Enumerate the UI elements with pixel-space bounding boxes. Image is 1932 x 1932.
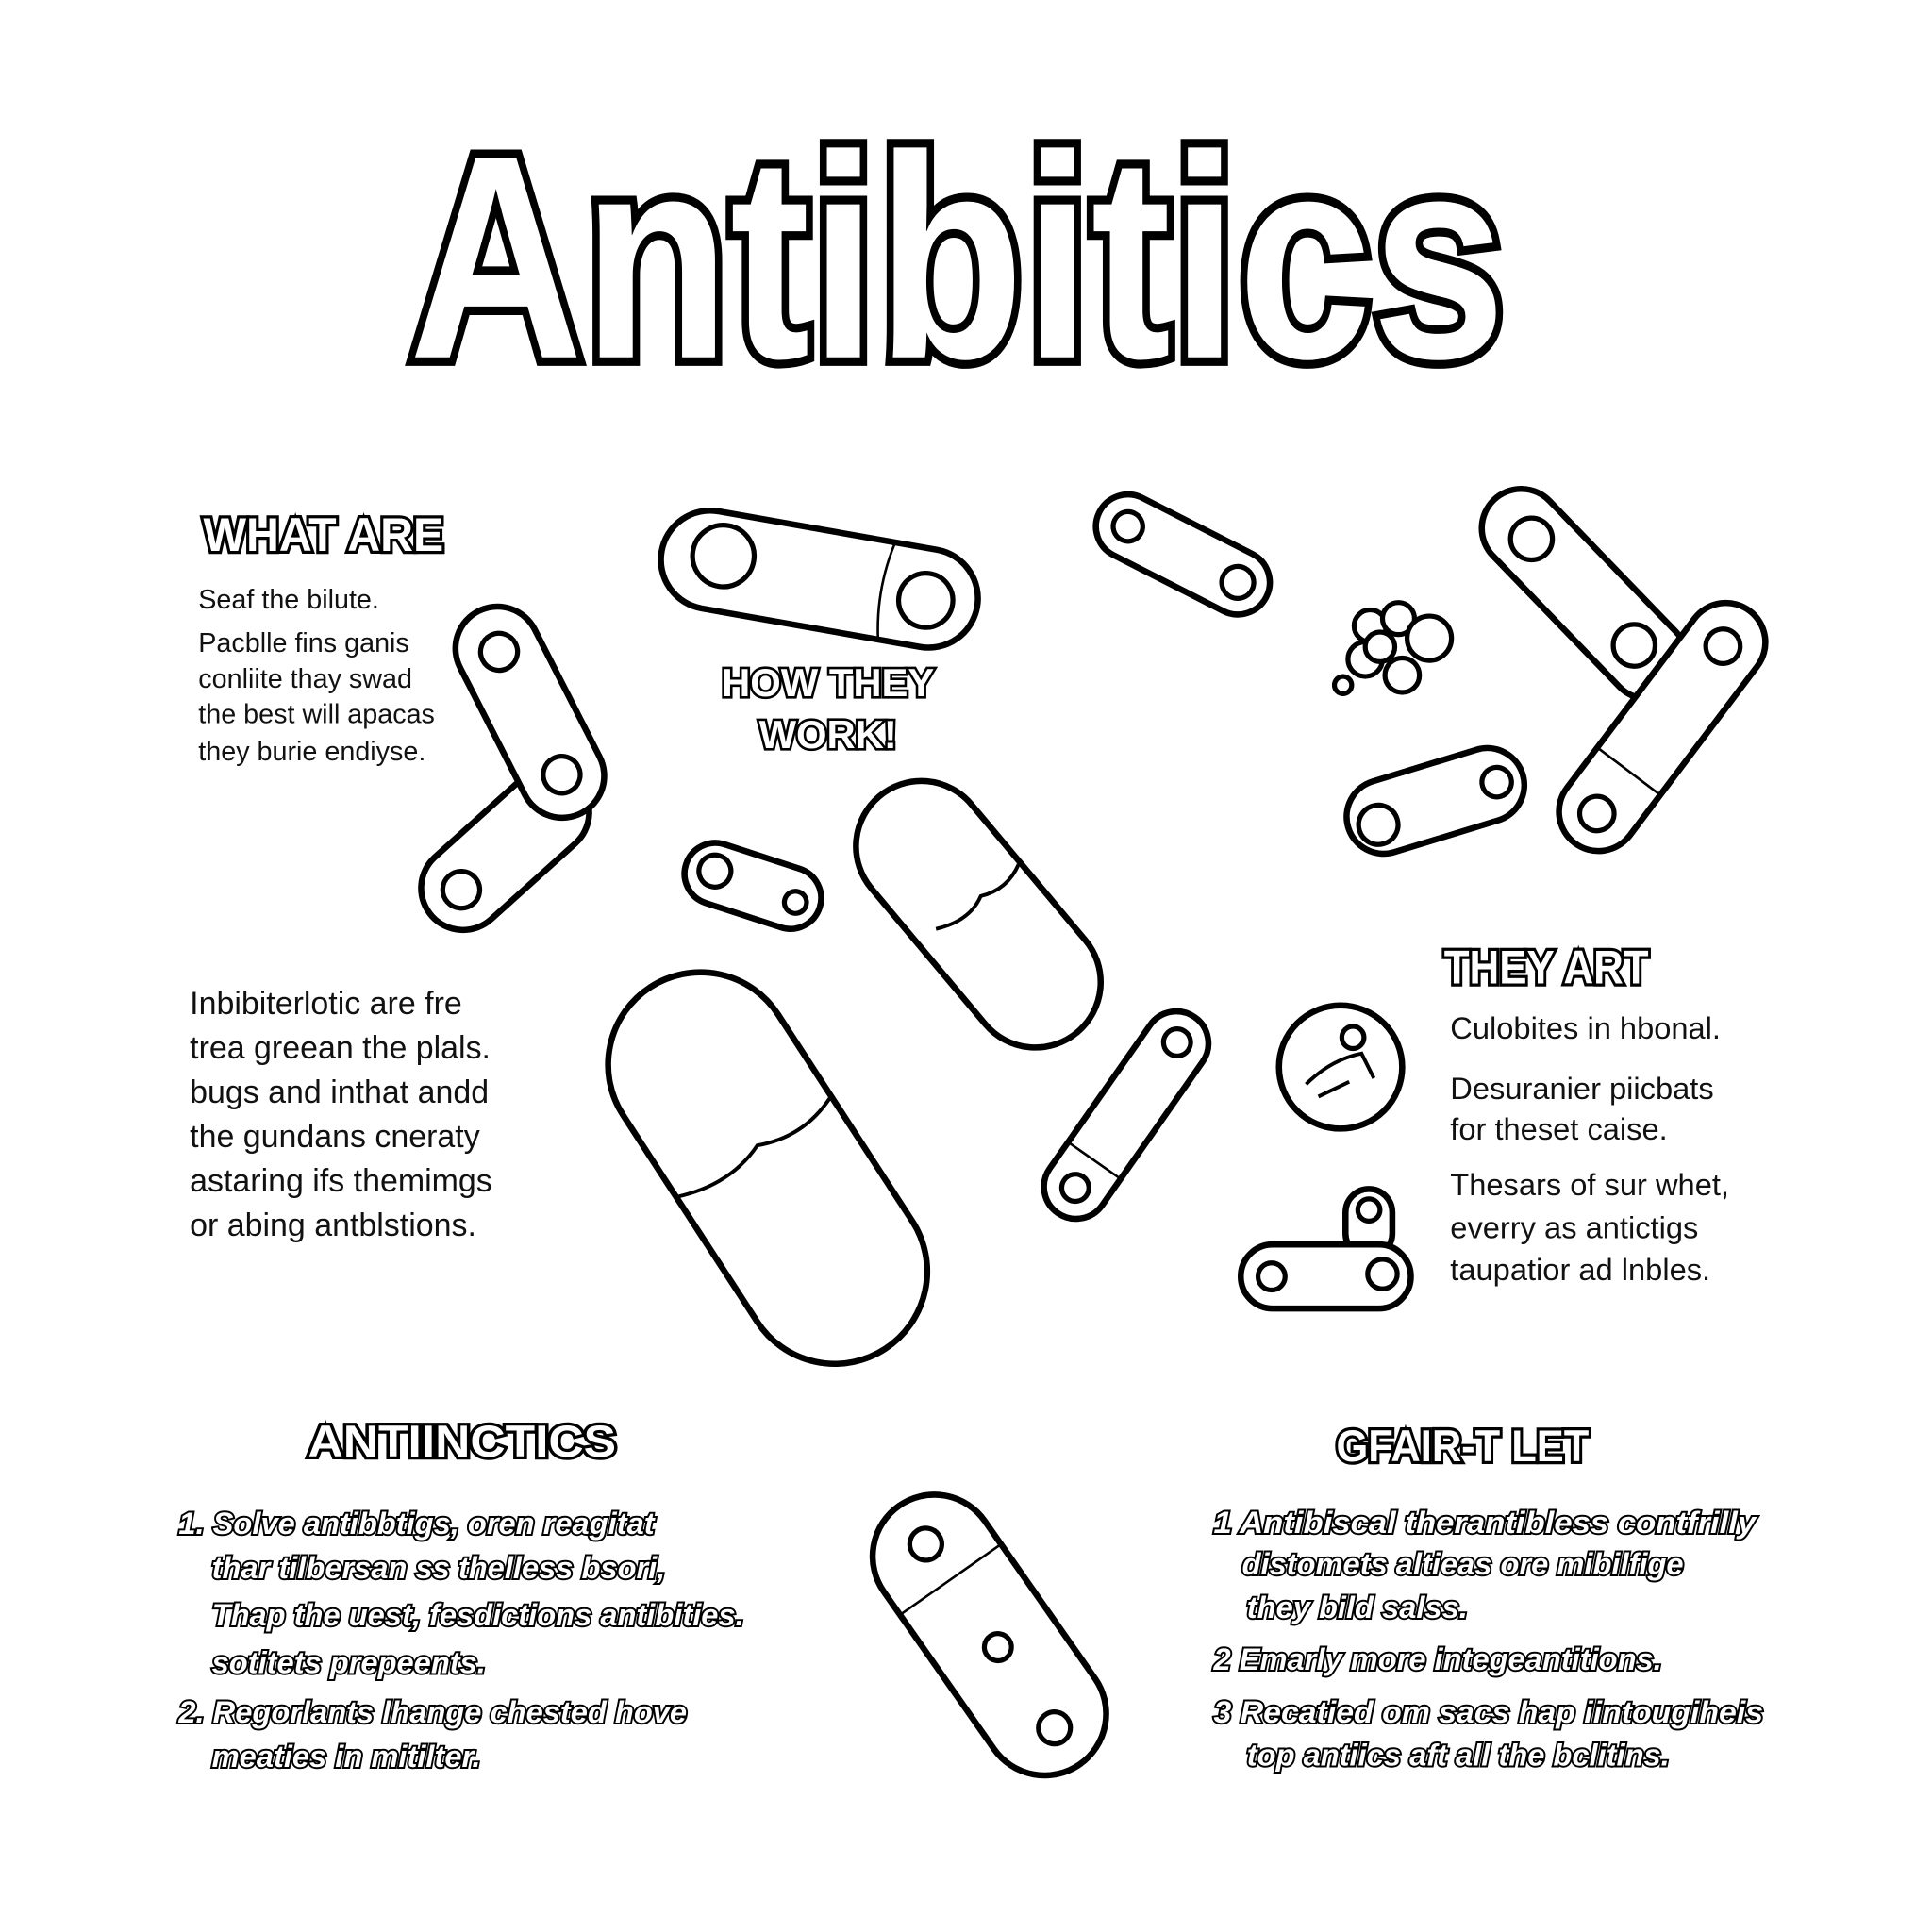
pill: small bottom right: [1241, 1189, 1411, 1308]
text block: left paragraph: Inbibiterlotic are fre: [190, 986, 462, 1022]
heading: how they work: WORK!: [759, 712, 897, 757]
title: Antibitics: [409, 96, 1506, 420]
text block: what are: Pacblle fins ganis: [198, 628, 409, 658]
list: gfair-t let: distomets altieas ore mibilfige: [1242, 1546, 1684, 1581]
text block: they art: Thesars of sur whet,: [1450, 1167, 1729, 1202]
list: antiinctics: [177, 1506, 744, 1774]
list: gfair-t let: [1213, 1505, 1763, 1773]
capsule: bottom: [848, 1471, 1130, 1800]
list: gfair-t let: 2 Emarly more integeantitions.: [1213, 1641, 1662, 1676]
list: gfair-t let: they bild salss.: [1247, 1590, 1468, 1624]
pill: right long: [1543, 587, 1781, 867]
capsule: big: [573, 937, 962, 1399]
pill: small diagonal: [1031, 999, 1221, 1231]
list: antiinctics: sotitets prepeents.: [212, 1645, 486, 1680]
text block: they art: for theset caise.: [1450, 1111, 1668, 1146]
text block: what are: conliite thay swad: [198, 664, 412, 694]
text block: left paragraph: bugs and inthat andd: [190, 1074, 489, 1110]
pill: small mid: [676, 835, 829, 937]
heading: they art: THEY ART: [1444, 941, 1649, 993]
list: antiinctics: thar tilbersan ss thelless bsori,: [212, 1550, 665, 1585]
pill: small top: [1085, 483, 1281, 625]
heading: how they work: [722, 660, 934, 757]
list: gfair-t let: 1 Antibiscal therantibless contfrilly: [1214, 1505, 1757, 1540]
text block: what are: [198, 585, 435, 767]
list: antiinctics: 1. Solve antibbtigs, oren reagitat: [178, 1506, 656, 1541]
list: gfair-t let: top antiics aft all the bclitins.: [1247, 1738, 1670, 1773]
text block: what are: they burie endiyse.: [198, 737, 425, 767]
list: antiinctics: 2. Regorlants lhange chested hove: [177, 1694, 687, 1729]
heading: what are: WHAT ARE: [204, 508, 443, 561]
text block: they art: everry as antictigs: [1450, 1210, 1698, 1245]
list: gfair-t let: 3 Recatied om sacs hap iintougiheis: [1214, 1694, 1763, 1729]
icon: bubble cluster: [1335, 603, 1452, 693]
text block: they art: Desuranier piicbats: [1450, 1071, 1714, 1106]
text block: they art: [1450, 1010, 1729, 1287]
list: antiinctics: meaties in mitilter.: [212, 1739, 480, 1774]
heading: gfair-t let: GFAIR-T LET: [1336, 1421, 1589, 1471]
pill: left bent: [404, 592, 619, 947]
text block: what are: Seaf the bilute.: [198, 585, 379, 615]
pill: right diagonal: [1465, 473, 1704, 715]
text block: left paragraph: trea greean the plals.: [190, 1030, 491, 1066]
heading: antiinctics: ANTIINCTICS: [308, 1416, 616, 1466]
text block: left paragraph: the gundans cneraty: [190, 1119, 480, 1155]
text block: what are: the best will apacas: [198, 700, 435, 730]
text block: left paragraph: astaring ifs themimgs: [190, 1163, 492, 1199]
text block: they art: taupatior ad lnbles.: [1450, 1252, 1710, 1287]
capsule: middle: [829, 755, 1127, 1074]
list: antiinctics: Thap the uest, fesdictions antibities.: [212, 1597, 744, 1632]
icon: circle with figure: [1279, 1006, 1402, 1128]
pill: right small: [1338, 739, 1534, 863]
text block: left paragraph: [190, 986, 492, 1243]
text block: left paragraph: or abing antblstions.: [190, 1208, 476, 1243]
heading: how they work: HOW THEY: [722, 660, 934, 705]
pill: top: [653, 503, 986, 656]
text block: they art: Culobites in hbonal.: [1450, 1010, 1721, 1045]
